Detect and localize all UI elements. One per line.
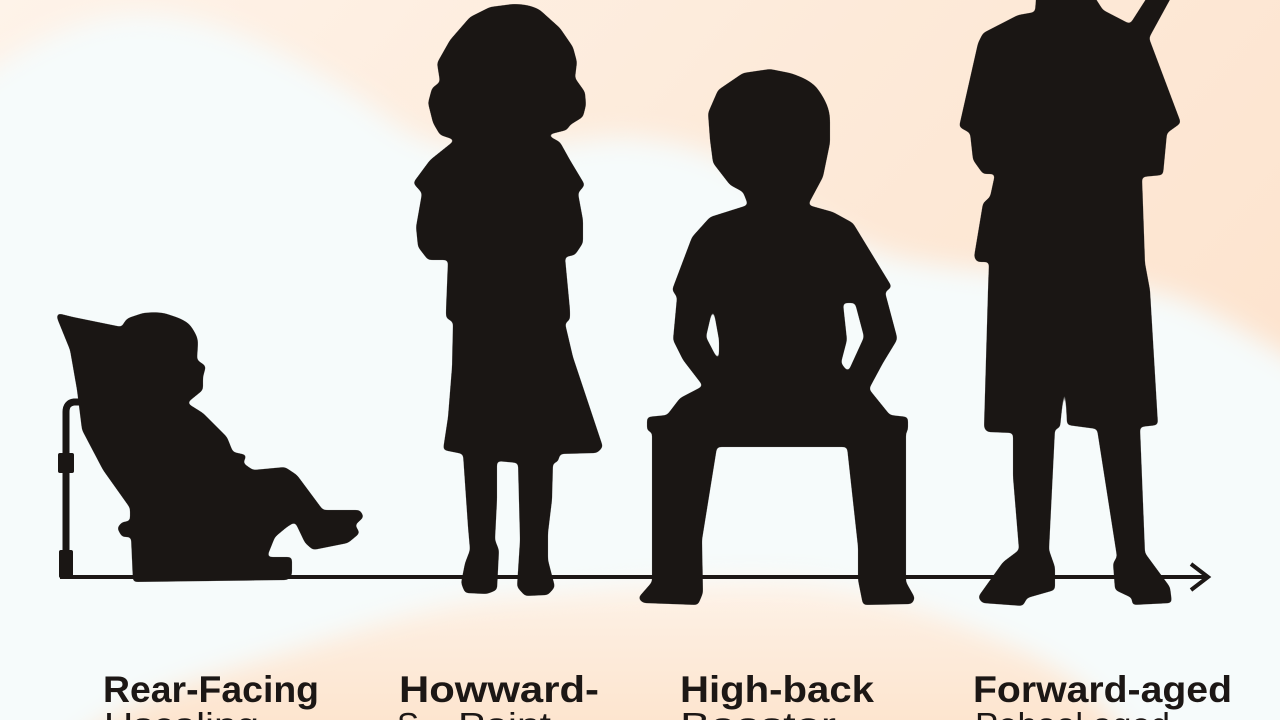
silhouette: seated child on booster [638, 69, 915, 605]
label: high-back booster: High-back [680, 669, 874, 710]
silhouette: standing girl [413, 4, 603, 596]
label: forward-aged: Forward-aged [973, 669, 1232, 710]
label: forward-facing: Howward- [399, 669, 599, 710]
label: rear-facing: Rear-Facing [103, 669, 319, 710]
silhouette: standing older child [959, 0, 1181, 606]
timeline arrow [60, 564, 1208, 590]
silhouette: infant in rear-facing seat [57, 312, 364, 582]
